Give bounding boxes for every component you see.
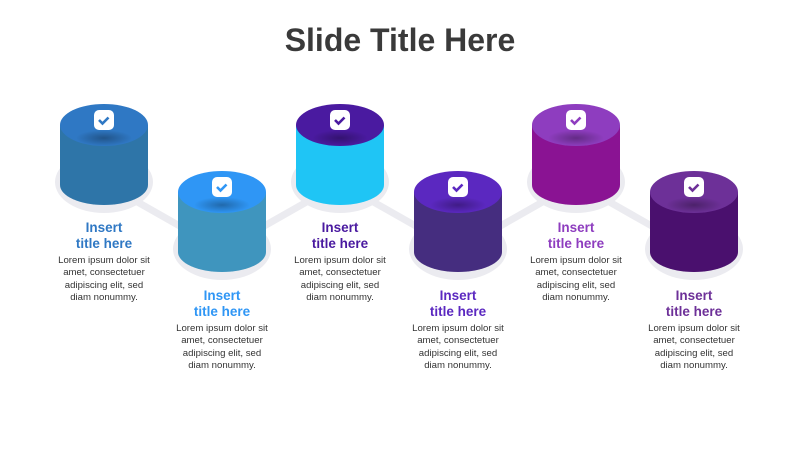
text 3: amet, consectetuer (299, 267, 381, 278)
text 2: adipiscing elit, sed (183, 348, 261, 359)
cylinder 3 (291, 104, 389, 213)
text 1 (58, 220, 150, 303)
text 1: title here (76, 236, 132, 251)
text 3: Insert (322, 220, 358, 235)
text 5: diam nonummy. (542, 292, 610, 303)
text 2: title here (194, 304, 250, 319)
text 3: Lorem ipsum dolor sit (294, 255, 386, 266)
text 5: Insert (558, 220, 594, 235)
text 5 (530, 220, 622, 303)
text 6: Lorem ipsum dolor sit (648, 323, 740, 334)
text 5: title here (548, 236, 604, 251)
text 4: Insert (440, 288, 476, 303)
text 3: title here (312, 236, 368, 251)
text 6 (648, 288, 740, 371)
cylinder 4 (409, 171, 507, 280)
text 2 (176, 288, 268, 371)
text 2: diam nonummy. (188, 360, 256, 371)
text 3: diam nonummy. (306, 292, 374, 303)
text 1: Insert (86, 220, 122, 235)
text 2: amet, consectetuer (181, 335, 263, 346)
cylinder 2 (173, 171, 271, 280)
text 5: adipiscing elit, sed (537, 280, 615, 291)
text 4: Lorem ipsum dolor sit (412, 323, 504, 334)
text 3 (294, 220, 386, 303)
cylinder 6 (645, 171, 743, 280)
title: Slide Title Here (285, 22, 515, 58)
text 4: title here (430, 304, 486, 319)
text 6: title here (666, 304, 722, 319)
text 6: adipiscing elit, sed (655, 348, 733, 359)
text 1: adipiscing elit, sed (65, 280, 143, 291)
text 4: adipiscing elit, sed (419, 348, 497, 359)
text 4 (412, 288, 504, 371)
text 1: Lorem ipsum dolor sit (58, 255, 150, 266)
text 1: amet, consectetuer (63, 267, 145, 278)
text 6: diam nonummy. (660, 360, 728, 371)
text 4: diam nonummy. (424, 360, 492, 371)
text 6: amet, consectetuer (653, 335, 735, 346)
text 3: adipiscing elit, sed (301, 280, 379, 291)
text 4: amet, consectetuer (417, 335, 499, 346)
text 2: Lorem ipsum dolor sit (176, 323, 268, 334)
connectors (104, 183, 694, 250)
cylinder 1 (55, 104, 153, 213)
text 5: amet, consectetuer (535, 267, 617, 278)
cylinder 5 (527, 104, 625, 213)
text 6: Insert (676, 288, 712, 303)
text 1: diam nonummy. (70, 292, 138, 303)
text 2: Insert (204, 288, 240, 303)
text 5: Lorem ipsum dolor sit (530, 255, 622, 266)
